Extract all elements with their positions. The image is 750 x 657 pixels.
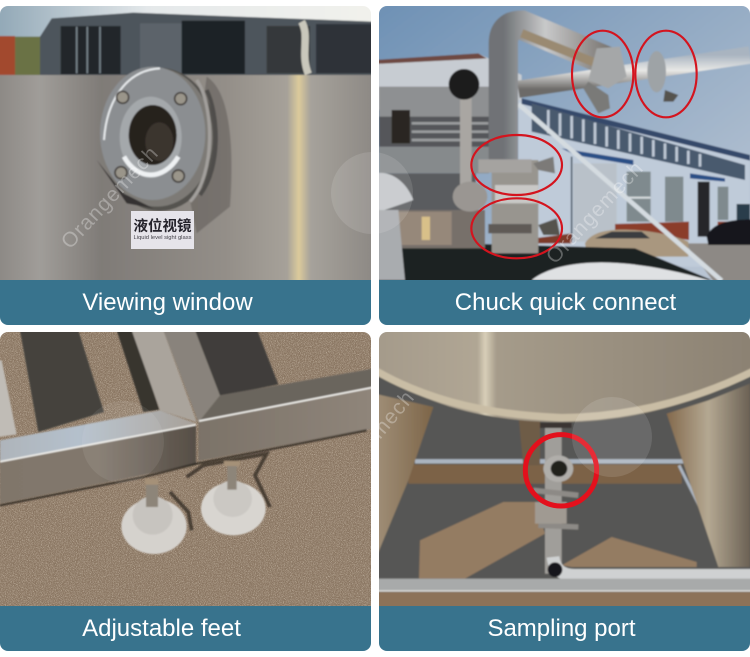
caption bar: Adjustable feet: Adjustable feet bbox=[82, 615, 241, 642]
panel: viewing window bbox=[0, 0, 380, 325]
caption bar: Sampling port bbox=[379, 606, 750, 651]
panel: sampling port bbox=[375, 327, 750, 651]
label: liquid level sight glass: 液位视镜 bbox=[134, 217, 192, 235]
watermarks: Orangemech bbox=[57, 142, 163, 253]
photo: stainless frame with adjustable feet on gravel bbox=[0, 327, 380, 610]
label: liquid level sight glass: Liquid level sight glass bbox=[133, 235, 192, 241]
caption bar: Chuck quick connect: Chuck quick connect bbox=[455, 289, 677, 316]
caption bar: Chuck quick connect bbox=[379, 280, 750, 325]
caption bar: Viewing window: Viewing window bbox=[82, 289, 253, 316]
caption bar: Adjustable feet bbox=[0, 606, 371, 651]
watermarks: mech bbox=[366, 386, 419, 443]
watermarks: Orangemech bbox=[542, 157, 648, 268]
panel: chuck quick connect bbox=[375, 0, 750, 325]
watermarks bbox=[57, 142, 652, 483]
callout: red circle around sampling port bbox=[525, 435, 597, 506]
callout: red circles around clamps bbox=[471, 31, 697, 258]
photo: liquid level sight glass on tank bbox=[0, 0, 380, 282]
photo: tank bottom with sampling valve bbox=[375, 327, 750, 610]
caption bar: Viewing window bbox=[0, 280, 371, 325]
caption bar: Sampling port: Sampling port bbox=[487, 615, 636, 642]
panel: adjustable feet bbox=[0, 327, 380, 651]
photo: pipework with clamps and factory building bbox=[375, 0, 750, 283]
label: liquid level sight glass bbox=[131, 211, 194, 249]
